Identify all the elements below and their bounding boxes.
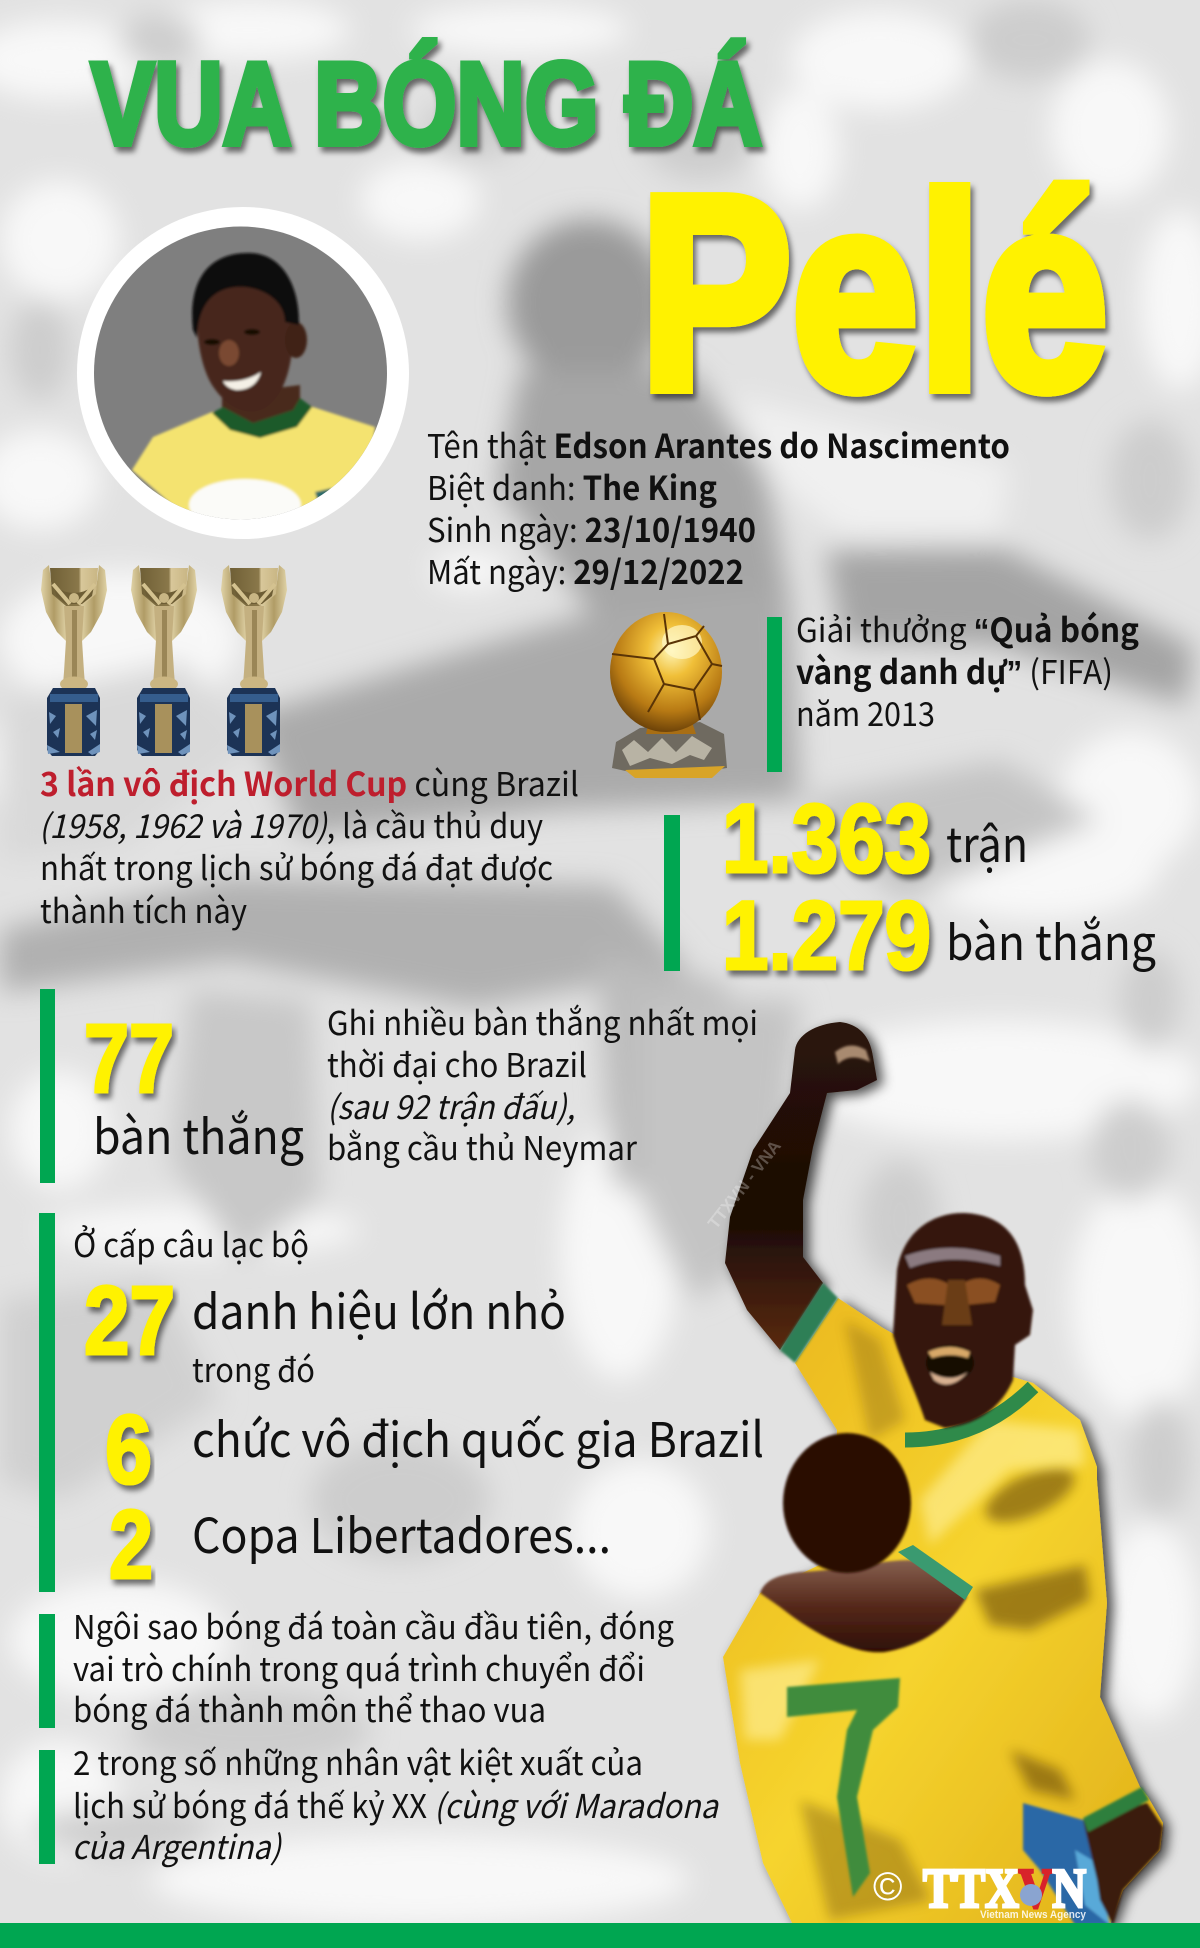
club titles block: 6: [105, 1395, 152, 1504]
stat: 1.363 matches: 1.363: [722, 784, 931, 893]
text: 20th century figures: của Argentina): [72, 1821, 283, 1869]
text: golden ball award: vàng danh dự” (FIFA): [796, 646, 1113, 694]
title: Pelé: Pelé: [640, 139, 1108, 447]
text: global star: Ngôi sao bóng đá toàn cầu đầu tiên, đóng: [73, 1601, 674, 1649]
text: Brazil goals record: [327, 997, 758, 1170]
text: 20th century figures: 2 trong số những nhân vật kiệt xuất của: [73, 1737, 643, 1785]
watermark on the arm: TTXVN - VNA: [704, 1137, 785, 1232]
club titles block: chức vô địch quốc gia Brazil: [192, 1401, 764, 1471]
personal info text: [427, 420, 1010, 594]
text: Brazil goals record: bằng cầu thủ Neymar: [327, 1122, 637, 1170]
title: VUA BÓNG ĐÁ: VUA BÓNG ĐÁ: [91, 38, 762, 169]
club titles block: [73, 1219, 764, 1599]
icon: golden ball trophy: [610, 612, 727, 778]
club titles block: Ở cấp câu lạc bộ: [73, 1219, 309, 1267]
stat: 1.279 goals: [722, 881, 1156, 990]
club titles block: danh hiệu lớn nhỏ: [192, 1273, 566, 1343]
club titles block: 27: [84, 1266, 175, 1375]
personal info text: Biệt danh: The King: [427, 462, 717, 510]
text: 3 World Cup titles: 3 lần vô địch World Cup cùng Brazil: [40, 758, 579, 806]
stat: 1.279 goals: 1.279: [722, 881, 931, 990]
stat: 77 goals: [84, 1004, 304, 1168]
number 7 on the jersey: [787, 1678, 900, 1897]
text: Brazil goals record: Ghi nhiều bàn thắng nhất mọi: [327, 997, 758, 1045]
green bar: global star: [39, 1614, 55, 1728]
footer green bar: [0, 1923, 1200, 1948]
text: 3 World Cup titles: nhất trong lịch sử bóng đá đạt được: [40, 842, 553, 890]
club titles block: Copa Libertadores...: [192, 1497, 611, 1567]
text: 20th century figures: lịch sử bóng đá thế kỷ XX (cùng với Maradona: [73, 1780, 719, 1828]
logo: © TTXVN: [874, 1868, 1087, 1920]
text: 3 World Cup titles: thành tích này: [40, 885, 247, 933]
text: Brazil goals record: (sau 92 trận đấu),: [327, 1081, 575, 1129]
stat: 1.363 matches: trận: [946, 806, 1028, 876]
text: golden ball award: [796, 604, 1139, 736]
club titles block: 2: [109, 1490, 153, 1599]
icon: three World Cup trophies: [41, 565, 287, 756]
stat: 1.279 goals: bàn thắng: [946, 904, 1156, 974]
logo: © TTXVN: TTXVN: [923, 1858, 1086, 1920]
personal info text: Mất ngày: 29/12/2022: [427, 546, 744, 594]
portrait of Pelé in a white circle: [77, 207, 409, 539]
green bar: golden ball award: [767, 617, 782, 772]
photo: Pelé celebrating, lifted by a teammate: [704, 1022, 1163, 1925]
personal info text: Tên thật Edson Arantes do Nascimento: [427, 420, 1010, 468]
text: global star: [73, 1601, 674, 1732]
text: global star: bóng đá thành môn thể thao vua: [73, 1684, 546, 1732]
text: global star: vai trò chính trong quá trình chuyển đổi: [73, 1643, 645, 1691]
text: 3 World Cup titles: [39, 758, 579, 933]
text: 20th century figures: [72, 1737, 719, 1869]
green bar: 20th century: [39, 1750, 55, 1864]
personal info text: Sinh ngày: 23/10/1940: [427, 504, 756, 552]
text: golden ball award: năm 2013: [796, 688, 935, 736]
text: Brazil goals record: thời đại cho Brazil: [327, 1039, 587, 1087]
logo: © TTXVN: ©: [873, 1865, 902, 1909]
text: 3 World Cup titles: (1958, 1962 và 1970), là cầu thủ duy: [39, 800, 543, 848]
logo: © TTXVN: Vietnam News Agency: [980, 1909, 1087, 1921]
stat: 77 goals: 77: [84, 1004, 174, 1113]
stat: 77 goals: bàn thắng: [93, 1098, 304, 1168]
green bar: club titles: [39, 1213, 55, 1592]
green bar: career totals: [664, 815, 680, 971]
green bar: Brazil goals: [40, 989, 55, 1183]
text: golden ball award: Giải thưởng “Quả bóng: [796, 604, 1139, 652]
club titles block: trong đó: [192, 1344, 315, 1392]
